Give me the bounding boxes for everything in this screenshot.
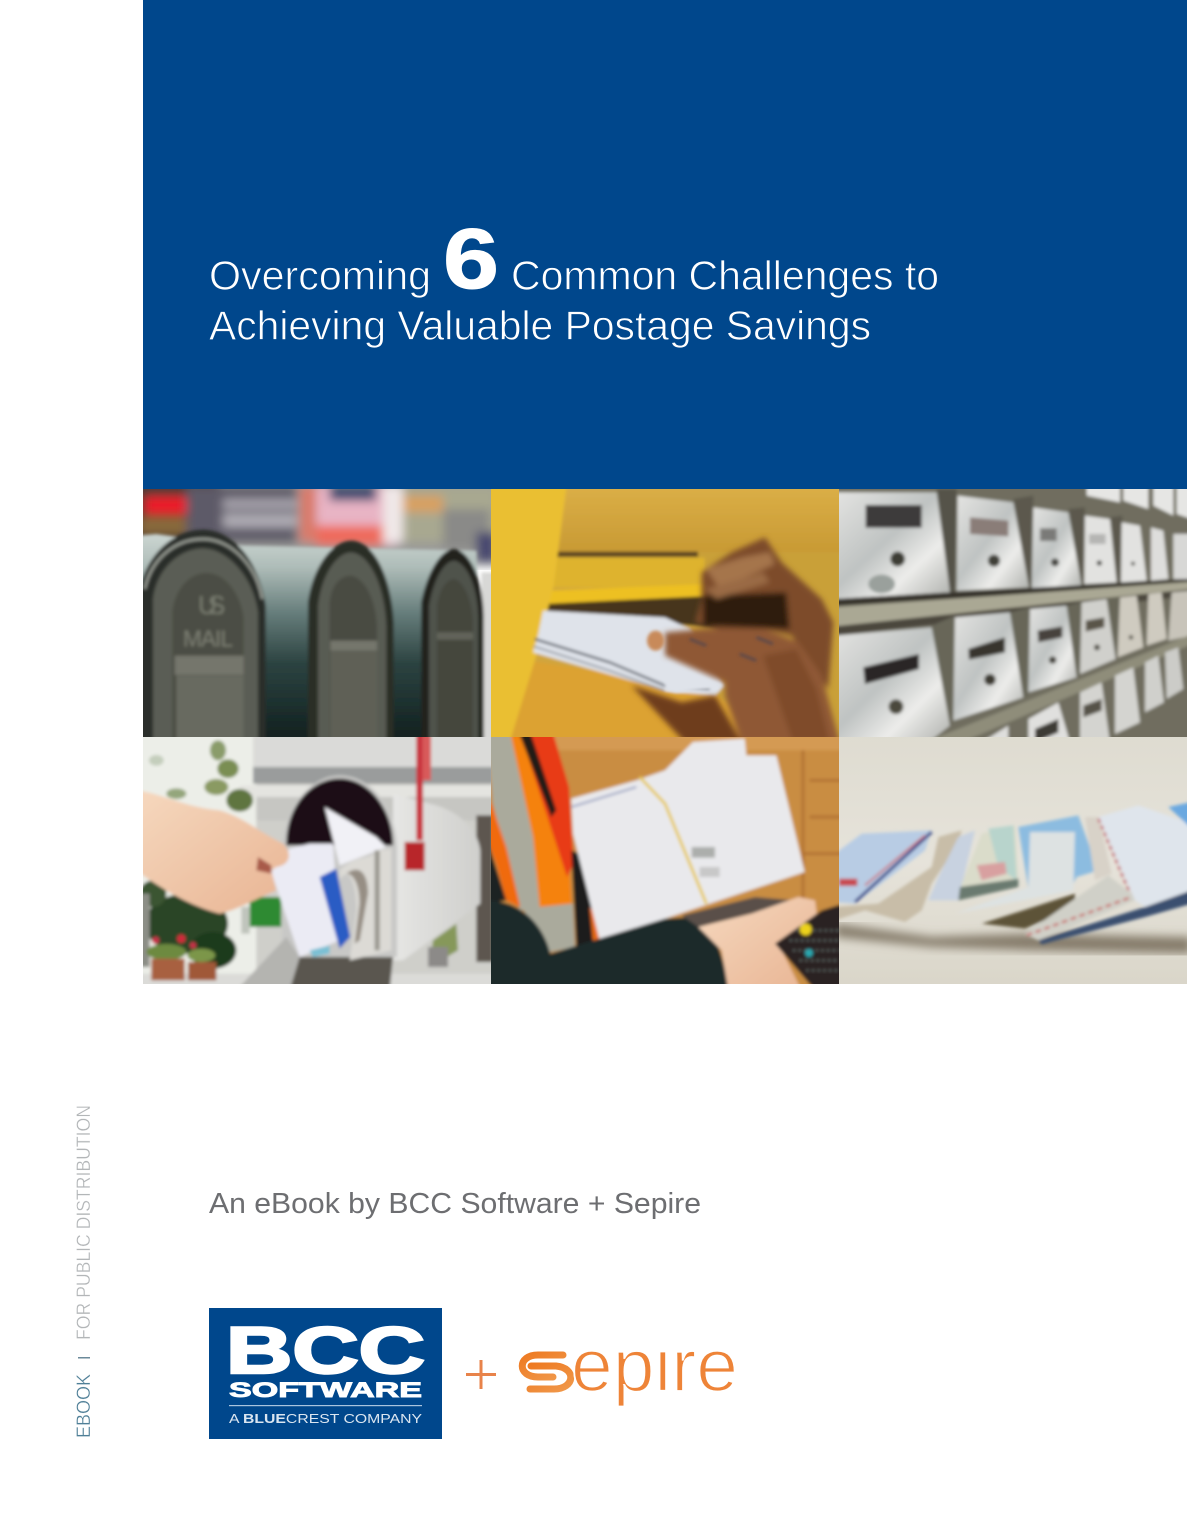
top stubs bbox=[1087, 486, 1120, 502]
top row of boxes bbox=[835, 492, 950, 599]
vertical side label bbox=[74, 1105, 95, 1438]
photo: wall of silver PO boxes bbox=[835, 482, 1187, 746]
logo wordmark BCC: BCC bbox=[226, 1313, 425, 1387]
title line 2: Achieving Valuable Postage Savings bbox=[209, 302, 871, 348]
mailbox 1 bbox=[140, 530, 266, 742]
third row of boxes bbox=[986, 724, 1011, 737]
jacket bbox=[486, 900, 730, 990]
title line 1 start: Overcoming bbox=[209, 252, 431, 298]
logo tagline: A BLUE CREST COMPANY bbox=[229, 1412, 423, 1426]
flag bbox=[416, 730, 423, 840]
photo: stack of worn airmail envelopes on a table bbox=[835, 730, 1187, 994]
mailbox door opening bbox=[282, 775, 397, 957]
hand holding scanner bbox=[698, 897, 817, 990]
BCC Software logo bbox=[209, 1308, 442, 1439]
lower shelf bbox=[937, 637, 1187, 737]
big numeral 6: 6 bbox=[443, 212, 499, 307]
scanner body bbox=[682, 897, 795, 927]
photo: courier holding bundle of letters and handheld scanner bbox=[486, 730, 846, 994]
icon: Sepire interlocked mark bbox=[522, 1355, 571, 1389]
side label separator bbox=[78, 1357, 90, 1358]
plus sign bbox=[466, 1360, 496, 1389]
logo wordmark SOFTWARE: SOFTWARE bbox=[229, 1379, 422, 1402]
title line 1 end: Common Challenges to bbox=[511, 252, 939, 298]
blue title panel bbox=[143, 0, 1187, 489]
envelopes bbox=[533, 611, 725, 696]
photo: hand taking letters from open rural mailbox bbox=[136, 730, 496, 994]
garden foliage bbox=[145, 894, 228, 954]
hands, softer focus bbox=[632, 537, 840, 742]
byline: An eBook by BCC Software + Sepire bbox=[209, 1188, 701, 1220]
vine foliage bbox=[210, 740, 226, 760]
side label: ebook: EBOOK bbox=[74, 1374, 95, 1438]
side label: for public distribution: FOR PUBLIC DISTRIBUTION bbox=[74, 1105, 95, 1340]
hand bbox=[136, 790, 289, 914]
photo: row of green US mailboxes bbox=[143, 489, 491, 737]
second row of boxes bbox=[835, 627, 950, 742]
mailbox 2 bbox=[308, 541, 394, 742]
mail pieces bbox=[325, 807, 386, 865]
mailbox 3 bbox=[421, 549, 484, 742]
photo: row of green US mailboxes: MAIL bbox=[183, 625, 233, 651]
shelf bbox=[835, 579, 1187, 606]
mailbox body bbox=[393, 794, 480, 960]
envelope bundle bbox=[571, 739, 805, 940]
title bbox=[209, 212, 939, 348]
photo: row of green US mailboxes: U.S. bbox=[198, 590, 225, 620]
photo: hand posting envelopes into yellow mail slot bbox=[486, 482, 846, 746]
Sepire wordmark: epire bbox=[571, 1324, 738, 1407]
Sepire logo bbox=[522, 1324, 738, 1407]
